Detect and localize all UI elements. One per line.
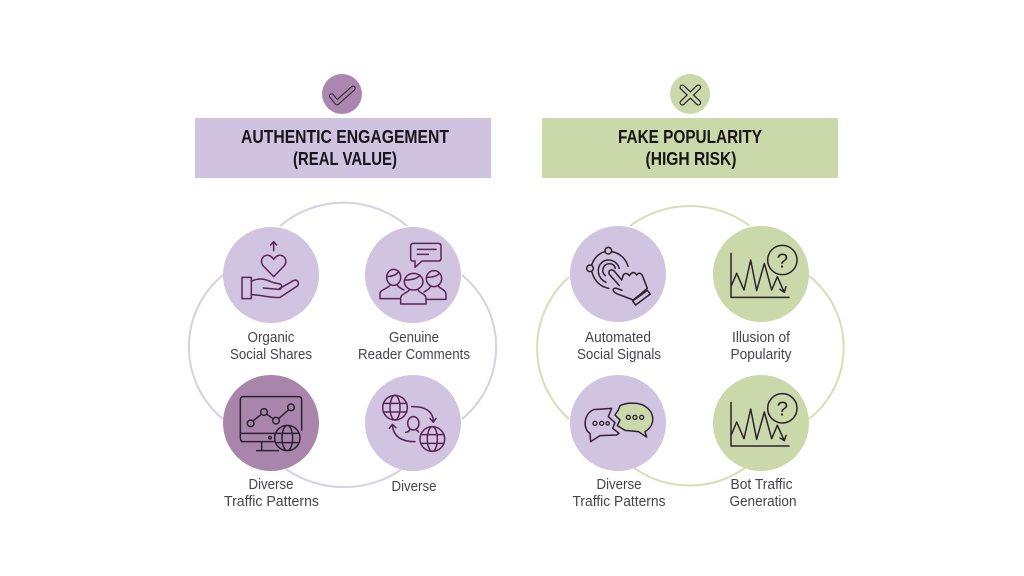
node: diverse traffic patterns: Diverse bbox=[596, 477, 642, 493]
heading banner: fake popularity: FAKE POPULARITY bbox=[618, 127, 762, 147]
heading banner: fake popularity: (HIGH RISK) bbox=[646, 149, 736, 169]
icon: heart in hand bbox=[242, 242, 298, 299]
node: genuine reader comments: Reader Comments bbox=[358, 347, 470, 363]
node: diverse traffic patterns bbox=[570, 375, 666, 510]
heading banner: authentic engagement: (REAL VALUE) bbox=[293, 149, 397, 169]
heading banner: fake popularity bbox=[542, 118, 838, 178]
node: diverse traffic patterns bbox=[223, 375, 319, 510]
node: illusion of popularity bbox=[713, 226, 809, 363]
node: illusion of popularity: Popularity bbox=[730, 347, 792, 363]
node: illusion of popularity: Illusion of bbox=[732, 330, 791, 346]
heading banner: authentic engagement bbox=[195, 118, 491, 178]
panel: authentic engagement bbox=[189, 74, 496, 510]
node: diverse traffic patterns: Traffic Patterns bbox=[224, 494, 319, 510]
icon: spiky chart with question mark: ? bbox=[777, 398, 788, 421]
node: diverse traffic patterns: Traffic Patterns bbox=[572, 494, 666, 510]
icon: spiky chart with question mark: ? bbox=[777, 249, 788, 272]
panel: fake popularity bbox=[537, 74, 844, 510]
node: diverse: Diverse bbox=[392, 479, 436, 495]
node: genuine reader comments: Genuine bbox=[389, 330, 439, 346]
node: automated social signals: Social Signals bbox=[577, 347, 661, 363]
node: organic social shares: Organic bbox=[248, 330, 294, 346]
icon: monitor with chart and globe bbox=[240, 397, 302, 451]
icon: cross badge bbox=[670, 74, 710, 114]
node: automated social signals: Automated bbox=[585, 330, 651, 346]
icon: check badge bbox=[322, 74, 362, 114]
icon: globes exchanging visitors bbox=[383, 395, 445, 451]
node: genuine reader comments bbox=[358, 227, 470, 363]
icon: two speech bubbles bbox=[585, 403, 653, 442]
icon: readers with speech bubble bbox=[380, 243, 446, 304]
node: diverse bbox=[365, 375, 461, 495]
node: organic social shares bbox=[223, 227, 319, 363]
node: diverse traffic patterns: Diverse bbox=[248, 477, 294, 493]
node: bot traffic generation: Generation bbox=[730, 494, 796, 510]
node: bot traffic generation bbox=[713, 375, 809, 510]
node: automated social signals bbox=[570, 226, 666, 363]
connecting ring arcs bbox=[189, 203, 496, 487]
connecting ring arcs bbox=[537, 206, 844, 485]
heading banner: authentic engagement: AUTHENTIC ENGAGEMENT bbox=[241, 127, 449, 147]
node: bot traffic generation: Bot Traffic bbox=[730, 477, 792, 493]
node: organic social shares: Social Shares bbox=[230, 347, 312, 363]
icon: pointer hand tapping bbox=[587, 247, 650, 305]
